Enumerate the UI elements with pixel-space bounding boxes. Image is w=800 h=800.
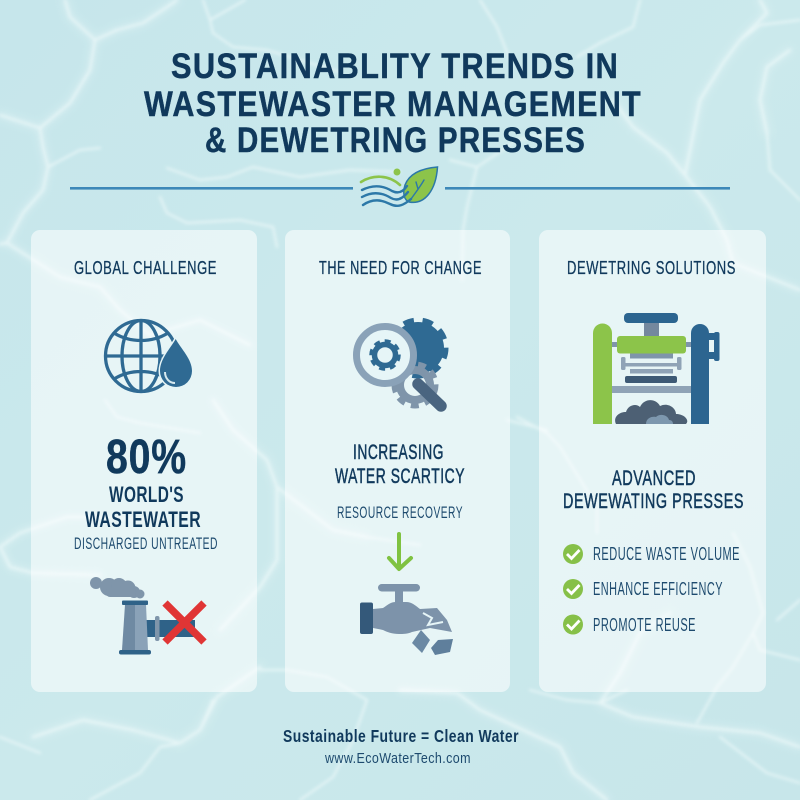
footer: Sustainable Future = Clean Water <box>283 726 519 746</box>
list item: enhance efficiency <box>563 579 723 599</box>
stat: 80%: 80% <box>106 431 187 484</box>
panel: global challenge <box>31 230 257 692</box>
list item: promote reuse <box>563 614 696 635</box>
text: advanced dewewating presses: ADVANCED <box>612 467 696 490</box>
icon: magnifier over gears <box>356 321 445 406</box>
text: world's wastewater: WORLD'S <box>109 482 184 507</box>
panel: the need for change <box>285 230 510 692</box>
list: benefits <box>563 544 740 635</box>
list item: promote reuse: PROMOTE REUSE <box>593 615 696 635</box>
title: SUSTAINABLITY TRENDS IN <box>171 46 619 86</box>
title: & DEWETRING PRESSES <box>205 120 586 160</box>
text: advanced dewewating presses <box>563 467 744 513</box>
arrow: down to faucet <box>389 534 411 569</box>
list item: reduce waste volume <box>563 544 740 564</box>
divider with water and leaf logo <box>70 167 730 206</box>
text: increasing water scarticy: INCREASING <box>353 441 444 464</box>
icon: globe with water drop <box>106 320 192 392</box>
title: WASTEWASTER MANAGEMENT <box>144 84 642 124</box>
icon: polluting pipe with red cross <box>90 577 204 654</box>
footer: www.EcoWaterTech.com <box>324 750 471 767</box>
panel: dewetring solutions <box>539 230 766 692</box>
icon: faucet with recycling arrows <box>360 584 453 655</box>
text: world's wastewater <box>85 482 201 532</box>
heading: dewetring solutions: DEWETRING SOLUTIONS <box>567 258 736 278</box>
text: increasing water scarticy <box>335 441 465 488</box>
text: increasing water scarticy: WATER SCARTICY <box>335 465 465 488</box>
title <box>144 46 642 160</box>
text: discharged untreated: DISCHARGED UNTREATED <box>74 535 218 553</box>
icon: leaf and waves logo <box>361 167 438 206</box>
footer <box>283 726 519 767</box>
icon: dewatering press <box>593 313 720 424</box>
heading: the need for change: THE NEED FOR CHANGE <box>319 258 482 278</box>
text: resource recovery: RESOURCE RECOVERY <box>337 503 463 522</box>
heading: global challenge: GLOBAL CHALLENGE <box>74 258 217 278</box>
text: world's wastewater: WASTEWATER <box>85 507 201 532</box>
